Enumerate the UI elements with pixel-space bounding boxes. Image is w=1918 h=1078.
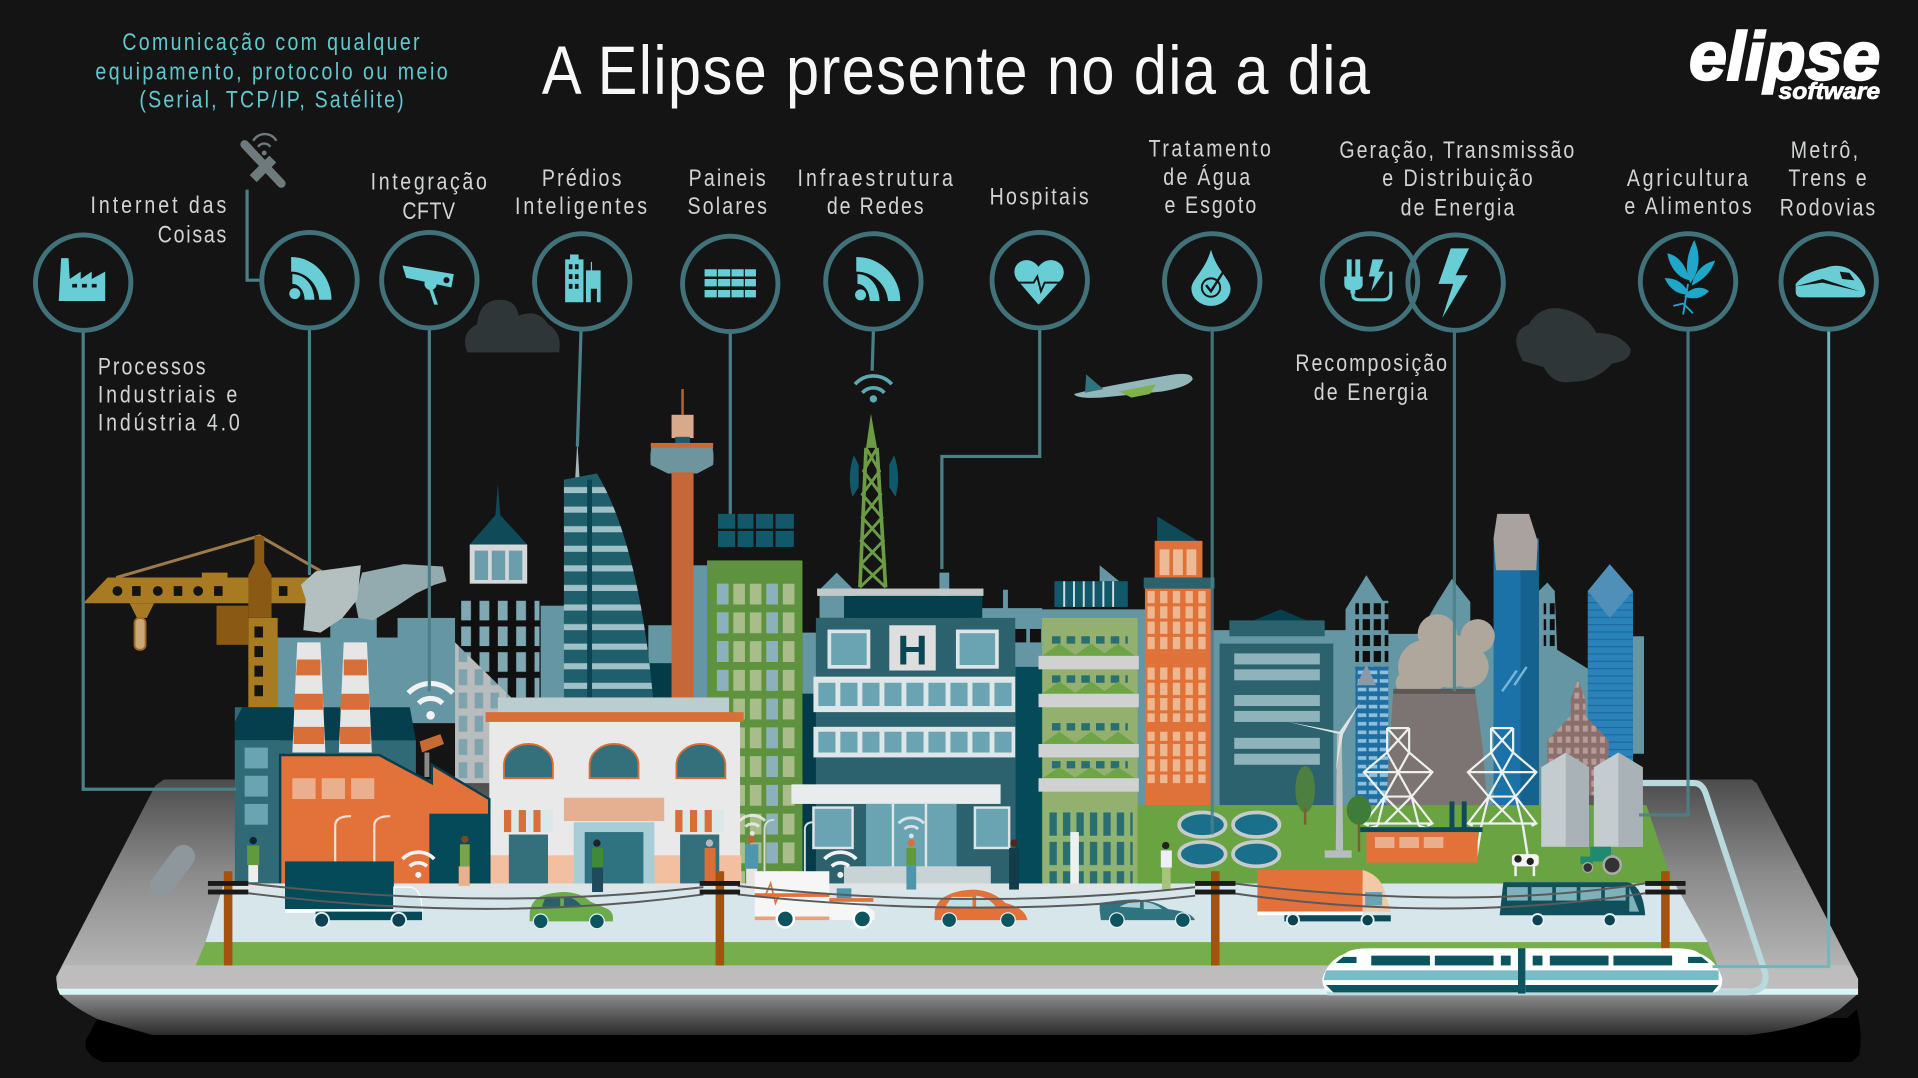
label: infraestrutura de redes: Infraestrutura	[798, 164, 953, 192]
silos	[1541, 753, 1643, 847]
curved striped tower	[564, 440, 653, 700]
icon: solar panel	[705, 269, 756, 297]
teal office block	[1220, 609, 1333, 805]
tower wifi	[855, 376, 892, 401]
label: hospitais: Hospitais	[990, 182, 1089, 210]
factory	[235, 642, 489, 893]
icon: train	[1796, 266, 1865, 297]
logo: elipse	[1689, 20, 1880, 95]
airplane	[1074, 374, 1193, 398]
label: prédios inteligentes	[515, 164, 647, 220]
bus	[1500, 882, 1645, 926]
hospital H sign: H	[898, 626, 928, 673]
icon: internet of things signal	[289, 257, 331, 300]
green terrace building	[1039, 618, 1139, 893]
label: geração transmissão distribuição: Geração, Transmissão	[1339, 136, 1574, 163]
power plant cooling tower and smoke	[1386, 614, 1495, 808]
label: geração transmissão distribuição	[1339, 136, 1574, 221]
cloud left	[465, 300, 560, 352]
label: recomposição de energia: Recomposição	[1295, 349, 1447, 376]
all text labels	[91, 28, 1875, 436]
factory smoke	[301, 564, 446, 633]
transmission pylons	[1364, 728, 1536, 857]
icon: buildings	[565, 255, 601, 302]
truck teal	[285, 861, 422, 927]
teal car	[1100, 899, 1195, 927]
connector lines	[83, 190, 1829, 967]
label: agricultura e alimentos	[1624, 164, 1752, 220]
tractor	[1580, 847, 1621, 874]
label: internet das coisas	[91, 191, 226, 248]
label: integração cftv: CFTV	[402, 197, 455, 225]
label: paineis solares: Solares	[687, 192, 767, 220]
icon circles	[35, 232, 1876, 332]
right skyline towers	[1355, 514, 1633, 814]
background skyline	[272, 565, 1644, 893]
hospital	[765, 589, 1046, 893]
label: agricultura e alimentos: Agricultura	[1627, 164, 1749, 192]
label: infraestrutura de redes: de Redes	[827, 192, 924, 220]
label: tratamento de água: e Esgoto	[1165, 191, 1256, 218]
observation tower	[650, 389, 714, 701]
communication caption: equipamento, protocolo ou meio	[95, 57, 448, 85]
cloud right	[1516, 308, 1631, 382]
label: paineis solares	[687, 164, 767, 220]
road and green strip	[196, 883, 1717, 965]
icon: factory	[59, 258, 105, 301]
label: agricultura e alimentos: e Alimentos	[1624, 192, 1752, 220]
label: tratamento de água: de Água	[1163, 163, 1251, 190]
orange truck	[1257, 870, 1391, 926]
icon: heart	[1014, 260, 1064, 305]
label: metrô trens rodovias	[1780, 136, 1875, 221]
orange tall building	[1144, 516, 1215, 805]
icon: network signal	[855, 257, 900, 301]
communication caption	[95, 28, 448, 113]
label: paineis solares: Paineis	[689, 164, 766, 192]
label: metrô trens rodovias: Trens e	[1788, 164, 1867, 192]
icon: lightning bolt	[1438, 248, 1469, 318]
label: geração transmissão distribuição: de Energia	[1401, 193, 1515, 221]
label: recomposição de energia	[1295, 349, 1447, 406]
satellite	[245, 134, 281, 184]
communication caption: Comunicação com qualquer	[122, 28, 420, 56]
title: A Elipse presente no dia a dia	[542, 32, 1370, 109]
water treatment tanks	[1179, 812, 1279, 866]
label: internet das coisas: Internet das	[91, 191, 226, 218]
tablet platform	[56, 779, 1861, 1062]
label: infraestrutura de redes	[798, 164, 953, 220]
telecom tower	[850, 414, 898, 587]
label: prédios inteligentes: Inteligentes	[515, 192, 647, 220]
green car	[530, 892, 613, 929]
label: geração transmissão distribuição: e Distribuição	[1382, 164, 1533, 192]
logo: software	[1779, 78, 1880, 104]
label: metrô trens rodovias: Metrô,	[1791, 136, 1858, 163]
icon: water drop	[1191, 250, 1231, 306]
label: integração cftv: Integração	[371, 168, 487, 195]
label: processos industriais: Processos	[98, 352, 206, 380]
orange car	[935, 890, 1028, 927]
communication caption: (Serial, TCP/IP, Satélite)	[139, 86, 404, 113]
label: integração cftv	[371, 168, 487, 225]
icon: plug	[1344, 259, 1391, 300]
rooftop solar array	[1015, 565, 1128, 642]
train	[1322, 948, 1722, 994]
label: tratamento de água: Tratamento	[1149, 135, 1271, 162]
trees	[1295, 766, 1371, 852]
brown building	[1547, 679, 1609, 795]
solar panels and green building	[707, 514, 802, 893]
people	[247, 836, 1172, 893]
label: tratamento de água	[1149, 135, 1271, 218]
white shop building	[486, 697, 744, 893]
utility poles and wires	[208, 871, 1686, 965]
icon: plant	[1666, 242, 1714, 314]
substation	[1360, 801, 1483, 863]
label: internet das coisas: Coisas	[158, 220, 226, 248]
label: processos industriais	[98, 352, 240, 436]
wind turbine	[1288, 702, 1360, 858]
dark windowed building	[455, 483, 539, 783]
label: metrô trens rodovias: Rodovias	[1780, 193, 1875, 221]
ambulance	[755, 871, 875, 927]
cow	[1512, 854, 1539, 876]
label: prédios inteligentes: Prédios	[542, 164, 621, 192]
label: processos industriais: Industriais e	[98, 380, 237, 408]
icon: cctv camera	[402, 266, 454, 305]
wifi symbols	[402, 684, 924, 878]
lawn	[1138, 805, 1677, 896]
label: recomposição de energia: de Energia	[1314, 378, 1428, 406]
construction crane	[83, 536, 328, 708]
label: processos industriais: Indústria 4.0	[98, 409, 240, 436]
